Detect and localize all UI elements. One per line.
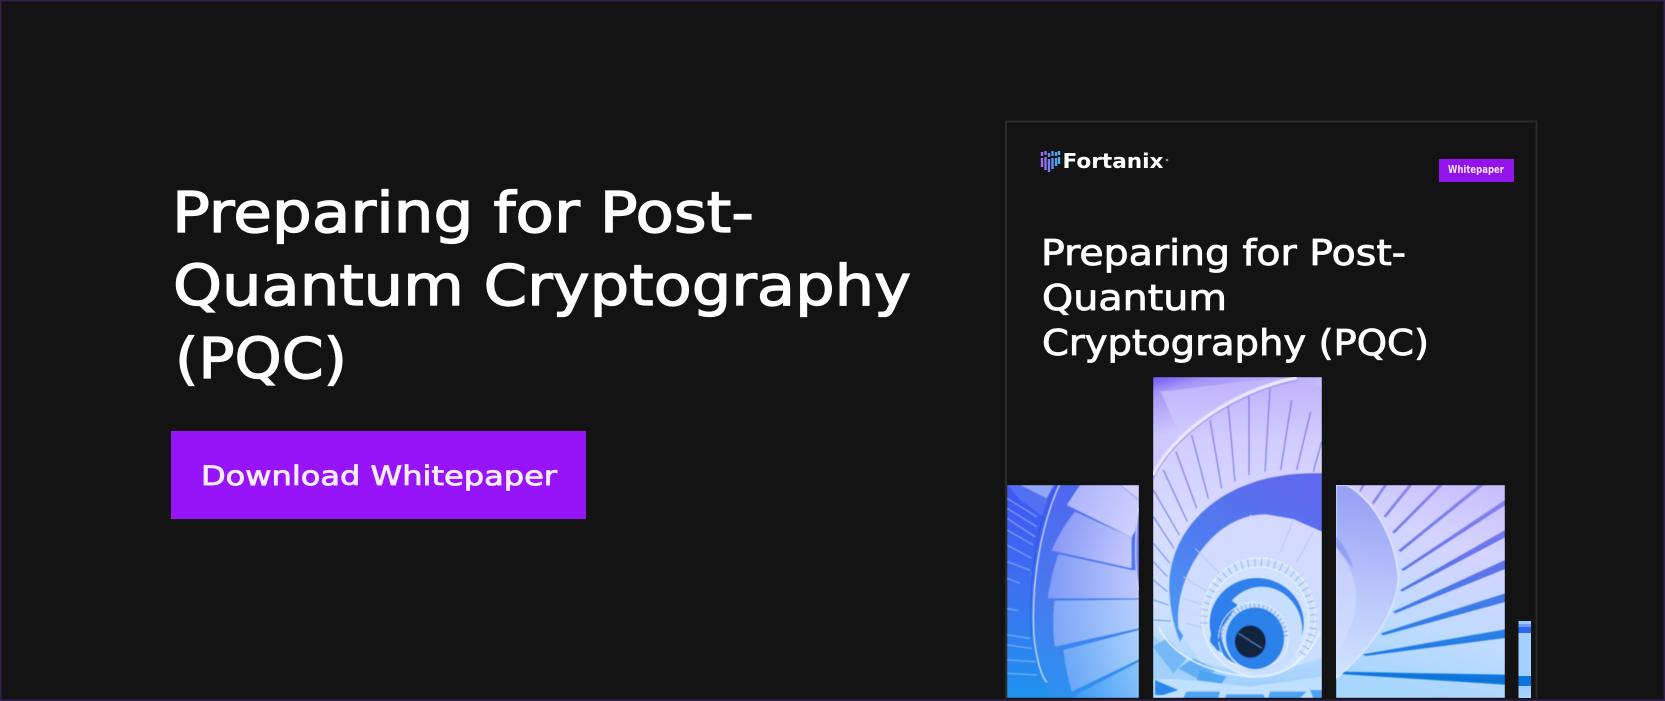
radiating stair edges — [1338, 485, 1505, 685]
cover title: Cryptography (PQC) — [1042, 323, 1429, 364]
badge: whitepaper: Whitepaper — [1448, 164, 1505, 176]
lower outer sweep and steps — [1153, 636, 1182, 672]
cover frame — [1006, 122, 1536, 699]
inner blue band — [1210, 578, 1304, 669]
image panel: centre staircase — [1153, 377, 1322, 698]
button: download whitepaper — [171, 431, 586, 519]
cover title: Quantum — [1042, 278, 1227, 319]
main heading: (PQC) — [175, 327, 347, 392]
panel: whitepaper cover — [1006, 122, 1536, 699]
cover title: Preparing for Post- — [1041, 233, 1406, 274]
inner ring — [1219, 602, 1288, 638]
badge: whitepaper — [1439, 159, 1514, 182]
button: download whitepaper: Download Whitepaper — [201, 461, 558, 492]
image panel: small right sliver — [1518, 621, 1531, 698]
railing balusters — [1153, 388, 1322, 621]
curved bowl — [1336, 485, 1398, 678]
image panel: right staircase — [1336, 485, 1505, 698]
main heading: Quantum Cryptography — [173, 254, 911, 319]
main heading: Preparing for Post- — [172, 181, 754, 246]
dark hole — [1235, 626, 1266, 658]
image panel: left staircase — [1007, 485, 1139, 698]
middle spiral ring — [1202, 558, 1315, 677]
outer handrail — [1154, 380, 1297, 478]
main heading — [172, 181, 911, 392]
logo: Fortanix: Fortanix — [1062, 149, 1164, 173]
cover title — [1041, 233, 1429, 364]
floor — [1178, 514, 1322, 677]
centre disc — [1226, 608, 1284, 669]
large blue curved band — [1169, 473, 1322, 642]
